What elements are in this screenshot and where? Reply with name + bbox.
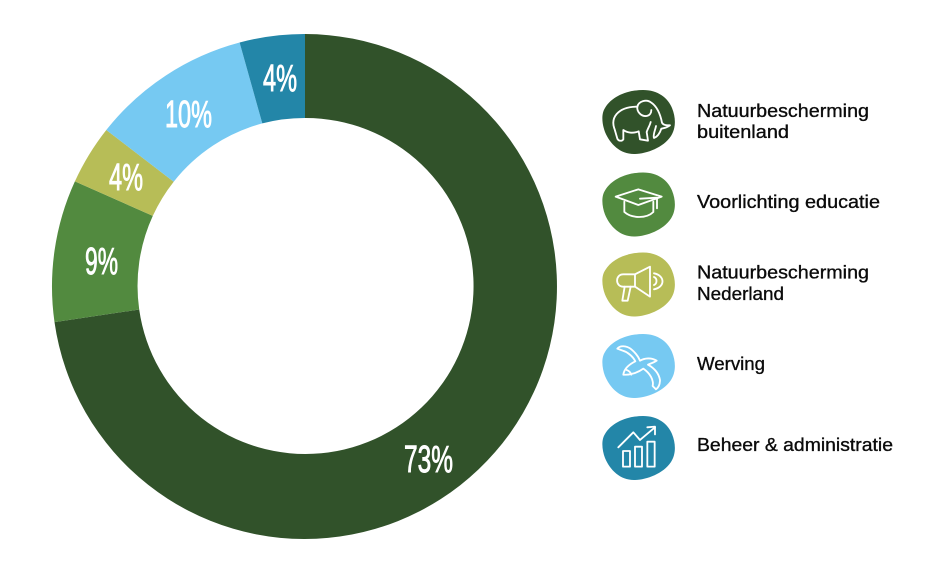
value: 4% olive: 4% bbox=[109, 157, 143, 199]
icon blob: green bbox=[602, 172, 675, 236]
label line 2: Nederland bbox=[697, 283, 784, 304]
value: 10%: 10% bbox=[165, 94, 212, 136]
icon: elephant bbox=[613, 101, 670, 141]
label line 2: buitenland bbox=[697, 121, 789, 142]
segment: beheer en administratie 4% bbox=[240, 34, 305, 123]
icon blob: light blue bbox=[602, 334, 675, 398]
label: Beheer & administratie bbox=[697, 434, 893, 455]
label: Natuurbescherming bbox=[697, 262, 869, 282]
label: Werving bbox=[697, 353, 765, 374]
legend item: beheer en administratie bbox=[602, 416, 893, 480]
icon blob: olive bbox=[602, 252, 675, 316]
segment: natuurbescherming nederland 4% bbox=[75, 130, 174, 216]
icon: rising bar chart bbox=[618, 427, 655, 467]
icon blob: teal bbox=[602, 416, 675, 480]
value: 4% teal: 4% bbox=[263, 58, 297, 100]
legend bbox=[602, 90, 893, 480]
icon: megaphone bbox=[617, 267, 662, 301]
donut chart bbox=[52, 34, 557, 539]
legend item: natuurbescherming buitenland bbox=[602, 90, 869, 154]
segment: werving 10% bbox=[106, 42, 262, 182]
legend item: voorlichting educatie bbox=[602, 172, 880, 236]
label: Natuurbescherming bbox=[697, 100, 869, 121]
label: Voorlichting educatie bbox=[697, 191, 880, 212]
value: 9%: 9% bbox=[85, 241, 118, 283]
icon: graduation cap bbox=[616, 189, 662, 217]
value: 73%: 73% bbox=[404, 439, 453, 481]
icon: albatross bbox=[617, 346, 660, 389]
segment: natuurbescherming buitenland 73% bbox=[54, 34, 557, 539]
icon blob: dark green bbox=[602, 90, 675, 154]
legend item: werving bbox=[602, 334, 765, 398]
legend item: natuurbescherming nederland bbox=[602, 252, 869, 316]
segment: voorlichting educatie 9% bbox=[52, 181, 153, 322]
